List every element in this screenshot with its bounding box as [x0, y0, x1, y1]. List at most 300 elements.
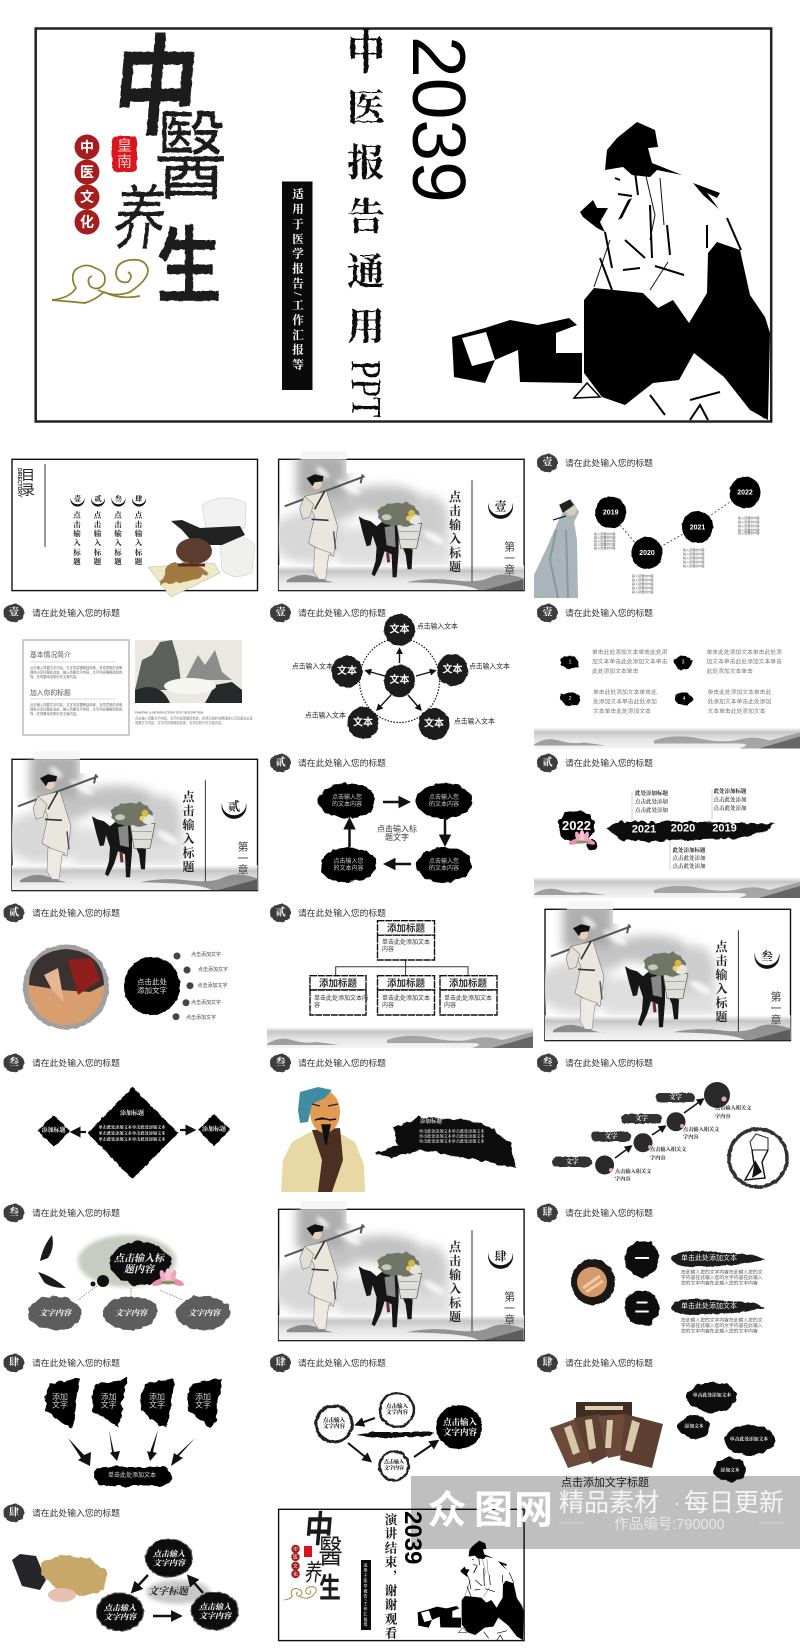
ink circle with text: 添加文字	[137, 985, 167, 995]
image caption: 简要文字内容，文字内容需概括精炼，言简意赅分享文案内容。	[135, 720, 224, 725]
timeline nodes: 2020	[639, 550, 655, 557]
connectors	[78, 1286, 183, 1300]
ink clouds with text: 单击此处添加文本	[730, 1436, 768, 1442]
timeline captions: 输入您要的内容	[683, 551, 705, 556]
year 2039: 2039	[397, 36, 481, 203]
logo: 众图网	[427, 1490, 553, 1532]
contents emblems and titles	[70, 494, 146, 567]
diamond text: 添加标题	[42, 1126, 66, 1134]
node labels: 点击输入文本	[454, 716, 495, 726]
panel: chapter two divider	[4, 751, 258, 891]
slide header: 请在此处输入您的标题	[298, 1057, 386, 1068]
heading: 目录	[16, 467, 35, 498]
org box text	[314, 922, 492, 1009]
pill text: 文字	[566, 1156, 579, 1166]
pill text	[566, 1092, 682, 1166]
annotations: 此处添加标题	[672, 846, 706, 854]
flow arrows	[348, 1418, 436, 1460]
bullet list: 点击添加文字	[191, 999, 221, 1006]
contents emblems and titles: 点击输入标题	[133, 510, 143, 567]
red stamp: 皇	[117, 138, 132, 154]
ink stroke with text: 添加标题	[420, 1117, 442, 1125]
org box text: 内容	[444, 1001, 456, 1009]
vertical title: 用	[347, 307, 385, 349]
logo: 众图网: 网	[514, 1490, 553, 1532]
slide header: 壹	[542, 606, 552, 618]
slide header: 贰	[276, 756, 286, 768]
point text: 单击此处添加文本单击此	[708, 688, 771, 696]
banner caption: 点击添加文字标题	[561, 1475, 649, 1489]
org box text: 内容	[382, 1001, 394, 1009]
seal: 中医文化: 化	[293, 1570, 298, 1578]
node labels: 点击输入文本	[417, 622, 458, 630]
slide header: 请在此处输入您的标题	[298, 907, 386, 918]
diamond text: 单击此处添加文本单击此处添加文本	[98, 1124, 166, 1130]
vertical title: 医	[347, 88, 385, 130]
seal: 中医文化: 文	[293, 1562, 298, 1570]
illustration: physician silhouette	[418, 1541, 524, 1640]
body text: 您的文字内容在此输入您的文字内容	[681, 1280, 758, 1286]
panel: chapter three divider	[537, 901, 790, 1041]
ink strokes with text: 文字	[101, 1400, 117, 1410]
slide header: 壹	[276, 606, 286, 618]
slide header	[537, 454, 653, 472]
body text: 字内容在此输入您的文字内容在此输入	[681, 1322, 763, 1329]
ring text: 文字内容	[384, 1464, 404, 1472]
vertical title: PPT	[342, 360, 388, 418]
body text	[681, 1268, 763, 1334]
slide header	[270, 754, 386, 772]
chapter emblem	[488, 498, 513, 519]
landscape band	[267, 1027, 533, 1048]
heading: 目录: DIRECTORY	[16, 468, 22, 498]
vertical title: 报	[347, 143, 385, 185]
diamond text: 单击此处添加文本单击此处添加文本	[98, 1130, 166, 1136]
slide header	[537, 604, 653, 622]
grey ink nodes	[28, 1296, 230, 1330]
grey ink nodes: 文字内容	[115, 1308, 149, 1318]
panel: contents slide	[12, 459, 258, 597]
chapter title: 点击输入标题	[714, 939, 728, 1024]
logo: 众图网: 众	[427, 1490, 467, 1532]
slide header	[537, 1054, 653, 1072]
chapter title: 点击输入标题	[448, 489, 462, 574]
portrait: ancient physician	[281, 1087, 365, 1192]
diamond text: 添加标题	[202, 1125, 226, 1133]
landscape band	[534, 877, 800, 898]
ink splats: 点击输入您	[333, 857, 364, 865]
ink stroke with years: 2021	[632, 824, 656, 836]
ink splats: 的文本内容	[429, 800, 459, 808]
annotations: 点击此处添加	[635, 798, 669, 806]
step labels: 字内容	[650, 1154, 666, 1162]
seal: 中医文化: 化	[80, 214, 94, 230]
timeline captions: 输入您要的内容	[738, 527, 760, 532]
banner slogan: 精品素材	[559, 1489, 659, 1517]
grey ink nodes: 文字内容	[188, 1308, 222, 1318]
converging arrows	[68, 1430, 195, 1466]
banner slogan: ·	[674, 1493, 680, 1513]
ring text: 文字内容	[443, 1427, 477, 1437]
chapter emblem: 叁	[761, 948, 773, 963]
panel: chapter one divider	[271, 451, 524, 591]
calligraphy title: 中	[303, 1509, 335, 1550]
step pills	[552, 1093, 695, 1167]
image caption: 点击输入简要文字内容，文字内容需概括精炼，言简意赅的说明提炼分享标题在此处	[135, 716, 254, 720]
text card: 点击输入简要文字内容，文字内容需概括精炼，言简意赅的说明	[30, 665, 123, 670]
ring text	[323, 1402, 477, 1472]
panel: chapter four divider	[271, 1201, 524, 1341]
timeline captions: 输入您要的内容	[594, 534, 616, 540]
ink clouds with text: 添加文本	[684, 1422, 704, 1430]
point text: 文本单击此处添加文本	[708, 707, 766, 715]
timeline captions: 输入您要的内容	[632, 581, 654, 586]
seal: 中医文化: 文	[80, 189, 94, 205]
bullet list: 点击添加文字	[186, 1014, 216, 1021]
ink stroke with years: 2022	[562, 818, 591, 833]
text card: 提炼分享标题在此处，输入简要文字内容，文字内容需概括精炼	[30, 670, 123, 674]
text card: 简，在简要地说明分享文案内容。	[30, 674, 79, 679]
slide header: 请在此处输入您的标题	[565, 757, 653, 768]
bullet list: 点击添加文字	[198, 982, 228, 989]
org box text: 单击此处添加文本内	[314, 994, 368, 1002]
ink labels: 单击此处添加文本	[681, 1301, 737, 1310]
timeline captions: 输入您要的内容	[738, 523, 760, 528]
org box text: 添加标题	[387, 978, 425, 990]
ink labels: 单击此处添加文本	[681, 1253, 737, 1262]
timeline captions: 输入您要的内容	[594, 531, 616, 536]
ink stroke with text: 单击此处添加文本单击此处添加文本	[419, 1132, 484, 1138]
ink splats	[319, 783, 472, 882]
slide header: 请在此处输入您的标题	[565, 1057, 653, 1068]
slide header	[270, 1354, 386, 1372]
timeline captions: 输入您要的内容	[594, 538, 616, 543]
ink splats: 点击输入您	[429, 857, 459, 865]
ink cloud title: 题内容	[124, 1264, 156, 1276]
slide header: 肆	[9, 1506, 19, 1518]
contents emblems and titles: 点击输入标题	[92, 510, 102, 567]
ink cloud title: 点击输入标	[114, 1252, 166, 1264]
slide header: 肆	[9, 1356, 19, 1368]
body text: 字内容在此输入您的文字内容在此输入	[681, 1274, 763, 1281]
slide header	[4, 1204, 120, 1222]
cover slide	[36, 27, 771, 422]
frame	[12, 759, 258, 891]
panel: books slide	[537, 1354, 775, 1482]
ink strokes with text: 添加	[101, 1392, 117, 1402]
calligraphy title: 醫	[155, 103, 227, 213]
ink numerals: 一	[634, 1250, 650, 1268]
panel: ring flow slide	[270, 1354, 482, 1480]
slide header: 叁	[9, 1206, 19, 1218]
black strip with subtitle: 适用于医学报告/工作汇报等	[364, 1562, 368, 1628]
slide header	[270, 604, 386, 622]
centre label: 文字标题	[148, 1586, 190, 1598]
frame	[279, 459, 524, 591]
panel: ink title and three nodes slide	[4, 1204, 230, 1330]
annotations: 此处添加标题	[714, 787, 747, 795]
org box text: 单击此处添加文本	[382, 938, 430, 946]
timeline captions: 输入您要的内容	[738, 515, 760, 520]
pill text: 文字	[604, 1131, 618, 1140]
frame	[279, 1509, 524, 1641]
dotted ring	[360, 638, 440, 722]
icon: gold cloud	[52, 260, 148, 303]
chapter number: 第一章	[503, 539, 515, 575]
text card: 提炼分享标题在此处，输入简要文字内容，文字内容需概括精炼	[30, 706, 123, 712]
calligraphy title: 生	[319, 1573, 341, 1604]
panel: converging arrows slide	[4, 1354, 222, 1486]
body text: 在此输入您的文字内容在此输入您的文	[681, 1316, 763, 1324]
text card	[23, 640, 129, 735]
ink circles: 点击输入	[153, 1550, 186, 1558]
illustration: herbs and jar	[148, 498, 255, 597]
panel: org chart slide	[267, 904, 533, 1048]
grey ink nodes: 文字内容	[39, 1308, 73, 1318]
illustration: elder in grey robe	[534, 500, 579, 598]
timeline connectors	[620, 500, 733, 547]
ink numerals	[625, 1241, 659, 1326]
node labels: 点击输入文本	[292, 662, 333, 670]
annotations: 点击此处添加	[672, 862, 706, 870]
red stamp: 南	[117, 154, 132, 170]
calligraphy title: 醫	[319, 1534, 343, 1571]
chapter number: 第一章	[503, 1289, 515, 1325]
vertical title: 告	[347, 197, 385, 239]
panel: four points slide	[534, 604, 800, 748]
pill text: 文字	[669, 1092, 682, 1101]
heading: 目录: 目	[21, 467, 35, 483]
chapter number: 第一章	[236, 839, 248, 875]
nodes: 文本	[337, 664, 357, 677]
ink circles	[96, 1539, 238, 1631]
slide header: 请在此处输入您的标题	[298, 607, 386, 618]
ink rings	[316, 1393, 482, 1480]
centre text: 题文字	[385, 832, 409, 842]
connectors	[336, 960, 468, 976]
centre text: 点击输入标	[377, 824, 417, 834]
contents emblems and titles: 壹	[74, 494, 81, 503]
icon: koi fish	[38, 1235, 66, 1288]
nodes: 文本	[424, 716, 444, 730]
ink circles: 文字内容	[199, 1612, 233, 1620]
calligraphy title: 中	[108, 27, 204, 149]
ink circles: 文字内容	[153, 1558, 187, 1568]
ink circles: 点击输入	[199, 1602, 232, 1612]
arrows	[74, 1130, 192, 1132]
chapter title: 点击输入标题	[181, 789, 195, 874]
org box text: 添加标题	[387, 922, 425, 934]
ring text: 点击输入	[323, 1416, 345, 1424]
timeline nodes: 2021	[690, 524, 705, 532]
timeline captions: 输入您要的内容	[683, 563, 705, 568]
panel: photo and list slide	[4, 904, 228, 1030]
point text: 单击此处添加文本单击此	[593, 688, 657, 696]
timeline captions: 输入您要的内容	[683, 547, 705, 552]
slide header: 请在此处输入您的标题	[298, 1357, 386, 1368]
slide header: 请在此处输入您的标题	[32, 1207, 120, 1218]
chapter title: 点击输入标题	[448, 1239, 462, 1324]
frame	[12, 459, 258, 591]
closing message: 演讲结束，谢谢观看	[382, 1513, 397, 1641]
seal: 中医文化: 中	[80, 139, 94, 155]
chapter emblem	[754, 948, 780, 969]
step labels	[615, 1104, 752, 1182]
timeline captions: 输入您要的内容	[683, 555, 705, 560]
org box text: 添加标题	[319, 978, 357, 990]
ink circle with text: 点击此处	[137, 976, 167, 986]
illustration: traveller and donkey	[271, 451, 524, 590]
point text: 处添加文本单击此处添加	[593, 698, 657, 706]
point text: 加文本单击此处添加文本单击	[706, 658, 782, 666]
panel: diamond slide	[4, 1054, 230, 1179]
illustration: traveller and donkey	[537, 901, 790, 1040]
wash behind title	[146, 1580, 210, 1604]
slide header: 请在此处输入您的标题	[565, 1207, 653, 1218]
illustration: dried herbs	[12, 1554, 107, 1602]
bullet list	[172, 951, 228, 1021]
ring text: 点击输入	[386, 1402, 408, 1410]
ring text: 文字内容	[386, 1408, 408, 1416]
point text: 加文本单击此处添加文本单击	[592, 658, 668, 666]
slide header: 肆	[276, 1356, 286, 1368]
ink stroke with years	[558, 810, 775, 850]
seal: 中医文化	[74, 134, 100, 234]
text card: 点击输入简要文字内容，文字内容需概括精炼，言简意赅的说明	[30, 702, 123, 707]
step labels: 点击输入相关文	[715, 1104, 752, 1112]
timeline captions: 输入您要的内容	[632, 573, 654, 578]
black strip with subtitle	[361, 1560, 371, 1630]
point text: 处添加文本单击此处添加	[708, 698, 771, 706]
annotations: 点击此处添加	[714, 796, 747, 804]
ink strokes with text: 添加	[195, 1392, 211, 1402]
ink splats: 点击输入您	[429, 793, 459, 801]
annotations: 点击此处添加	[714, 804, 747, 812]
numbered blobs: 4	[683, 696, 686, 702]
panel: cycle diagram slide	[270, 604, 510, 740]
illustration: landscape painting	[135, 640, 242, 703]
timeline captions: 输入您要的内容	[683, 559, 705, 564]
diamond text: 添加标题	[120, 1109, 144, 1117]
timeline nodes	[595, 476, 760, 569]
ink splats: 的文本内容	[333, 864, 364, 872]
image caption	[135, 710, 254, 725]
slide header: 请在此处输入您的标题	[32, 607, 120, 618]
slide header: 贰	[542, 756, 552, 768]
ink clouds with text: 单击此处添加文本	[693, 1392, 731, 1398]
calligraphy title: 养	[304, 1560, 324, 1586]
chapter emblem: 壹	[495, 498, 507, 513]
diamond text: 单击此处添加文本单击此处添加文本	[98, 1136, 166, 1142]
seal: 中医文化: 医	[293, 1554, 298, 1560]
slide header	[270, 904, 386, 922]
point text	[592, 648, 782, 715]
ink stroke with text: 单击此处添加文本单击此处添加文本	[419, 1138, 484, 1144]
point text: 文本单击此处添加文本	[593, 707, 651, 715]
timeline nodes: 2022	[737, 490, 753, 496]
org box text: 添加标题	[449, 978, 487, 990]
slide header: 壹	[542, 456, 552, 468]
ink bar	[356, 1432, 434, 1438]
slide header: 请在此处输入您的标题	[32, 1057, 120, 1068]
illustration: physician silhouette	[452, 122, 770, 420]
chapter emblem	[488, 1248, 513, 1269]
slide header: 叁	[542, 1056, 552, 1068]
chapter emblem: 肆	[495, 1248, 507, 1263]
image caption: PAINTING & INTRODUCTION TEXT DESCRIPTION	[135, 710, 203, 714]
vertical title: 中	[347, 27, 385, 80]
black strip with subtitle: 适用于医学报告/工作汇报等	[291, 187, 304, 373]
org box text: 容	[314, 1001, 320, 1009]
ink cloud title	[78, 1235, 185, 1288]
slide header: 壹	[9, 606, 19, 618]
ink stroke with text	[375, 1117, 515, 1168]
seal: 中医文化	[291, 1545, 312, 1578]
banner slogan: 每日更新	[684, 1489, 784, 1517]
numbered blobs: 3	[682, 660, 685, 666]
vertical title	[342, 27, 388, 418]
ink clouds with text	[678, 1382, 775, 1482]
node labels	[292, 622, 510, 726]
ink labels	[671, 1251, 765, 1315]
step labels: 点击输入相关文	[615, 1167, 652, 1175]
bullet list: 点击添加文字	[191, 951, 221, 958]
ink strokes with text: 文字	[52, 1400, 68, 1410]
slide header	[537, 1354, 653, 1372]
chapter emblem: 贰	[228, 798, 240, 813]
slide header: 叁	[9, 1056, 19, 1068]
ink circle with text	[124, 957, 180, 1015]
contents emblems and titles: 叁	[115, 494, 122, 503]
text card: 基本情况简介	[30, 650, 71, 659]
slide header: 请在此处输入您的标题	[32, 907, 120, 918]
org boxes	[310, 921, 497, 1015]
text card: 加入你的标题	[30, 688, 71, 697]
ink circles: 点击输入	[104, 1604, 137, 1612]
slide header: 请在此处输入您的标题	[565, 607, 653, 618]
step nodes	[595, 1082, 730, 1174]
step labels: 点击输入相关文	[683, 1125, 720, 1133]
watermark banner	[411, 1475, 800, 1549]
black strip with subtitle	[282, 182, 312, 390]
timeline captions: 输入您要的内容	[594, 545, 616, 550]
timeline captions: 输入您要的内容	[632, 585, 654, 590]
node labels: 点击输入文本	[469, 662, 510, 670]
slide header	[4, 1354, 120, 1372]
slide header	[4, 904, 120, 922]
panel: intro slide	[4, 604, 254, 735]
slide header: 请在此处输入您的标题	[298, 757, 386, 768]
timeline nodes: 2019	[603, 510, 619, 516]
contents emblems and titles: 肆	[135, 494, 142, 503]
medallion portrait	[729, 1129, 787, 1187]
slide header: 请在此处输入您的标题	[32, 1507, 120, 1518]
illustration: medical books	[550, 1402, 663, 1468]
nodes: 文本	[390, 622, 410, 636]
point text: 单击此处添加文本单击此处添	[706, 648, 782, 656]
step labels: 点击输入相关文	[650, 1145, 687, 1153]
contents emblems and titles: 点击输入标题	[112, 510, 122, 567]
numbered blobs: 2	[569, 696, 572, 702]
ink strokes with text: 文字	[149, 1400, 165, 1410]
calligraphy title	[108, 27, 227, 313]
slide header: 肆	[542, 1206, 552, 1218]
step labels: 字内容	[683, 1132, 699, 1140]
illustration: traveller and donkey	[271, 1201, 524, 1340]
slide header: 贰	[9, 906, 19, 918]
seal: 中医文化: 中	[293, 1546, 298, 1552]
cycle arrows	[134, 1575, 203, 1616]
